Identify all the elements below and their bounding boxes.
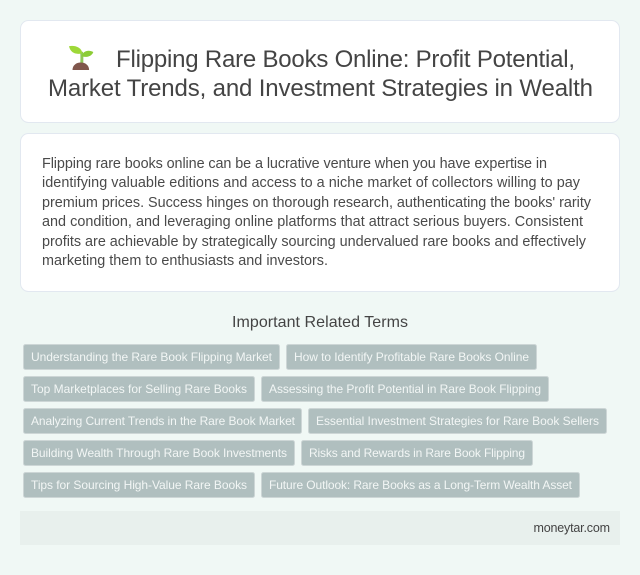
heading: related terms: Important Related Terms (232, 314, 408, 331)
chip: identify profitable books: How to Identify Profitable Rare Books Online (294, 350, 529, 364)
panel: title card (20, 20, 620, 122)
footer: moneytar.com (534, 521, 610, 535)
chip: identify profitable books (286, 344, 536, 370)
title: Market Trends, and Investment Strategies in Wealth (48, 75, 593, 102)
text block: summary (42, 156, 592, 269)
chip: top marketplaces: Top Marketplaces for Selling Rare Books (31, 382, 247, 396)
text block: summary: marketing them to enthusiasts and investors. (42, 253, 328, 269)
panel: term chips (24, 344, 606, 498)
text block: summary: premium prices. Success hinges on thorough research, authenticating the books' rarity (42, 195, 592, 211)
chip: building wealth (24, 440, 294, 466)
chip: future outlook (262, 472, 580, 498)
text block: summary: and condition, and leveraging online platforms that attract serious buyers. Consistent (42, 214, 583, 230)
chip: current trends: Analyzing Current Trends in the Rare Book Market (31, 414, 296, 428)
chip: current trends (24, 408, 302, 434)
text block: summary: profits are achievable by strategically sourcing undervalued rare books and effectively (42, 234, 587, 250)
chip: risks and rewards (302, 440, 532, 466)
chip: top marketplaces (24, 376, 254, 402)
chip: building wealth: Building Wealth Through Rare Book Investments (31, 446, 287, 460)
chip: profit potential (262, 376, 548, 402)
chip: sourcing tips (24, 472, 254, 498)
chip: profit potential: Assessing the Profit Potential in Rare Book Flipping (269, 382, 541, 396)
chip: risks and rewards: Risks and Rewards in Rare Book Flipping (309, 446, 525, 460)
text block: summary: identifying valuable editions and access to a niche market of collectors willing to pay (42, 175, 581, 191)
chip: investment strategies (308, 408, 606, 434)
icon: sprout (69, 46, 93, 70)
chip: future outlook: Future Outlook: Rare Books as a Long-Term Wealth Asset (269, 478, 573, 492)
title (48, 46, 593, 102)
title: Flipping Rare Books Online: Profit Potential, (116, 46, 575, 73)
chip: sourcing tips: Tips for Sourcing High-Value Rare Books (31, 478, 247, 492)
chip: understanding market: Understanding the Rare Book Flipping Market (31, 350, 273, 364)
chip: investment strategies: Essential Investment Strategies for Rare Book Sellers (316, 414, 599, 428)
panel: summary card (20, 134, 620, 292)
chip: understanding market (24, 344, 280, 370)
text block: summary: Flipping rare books online can be a lucrative venture when you have expertise in (42, 156, 547, 172)
footer (20, 511, 620, 545)
